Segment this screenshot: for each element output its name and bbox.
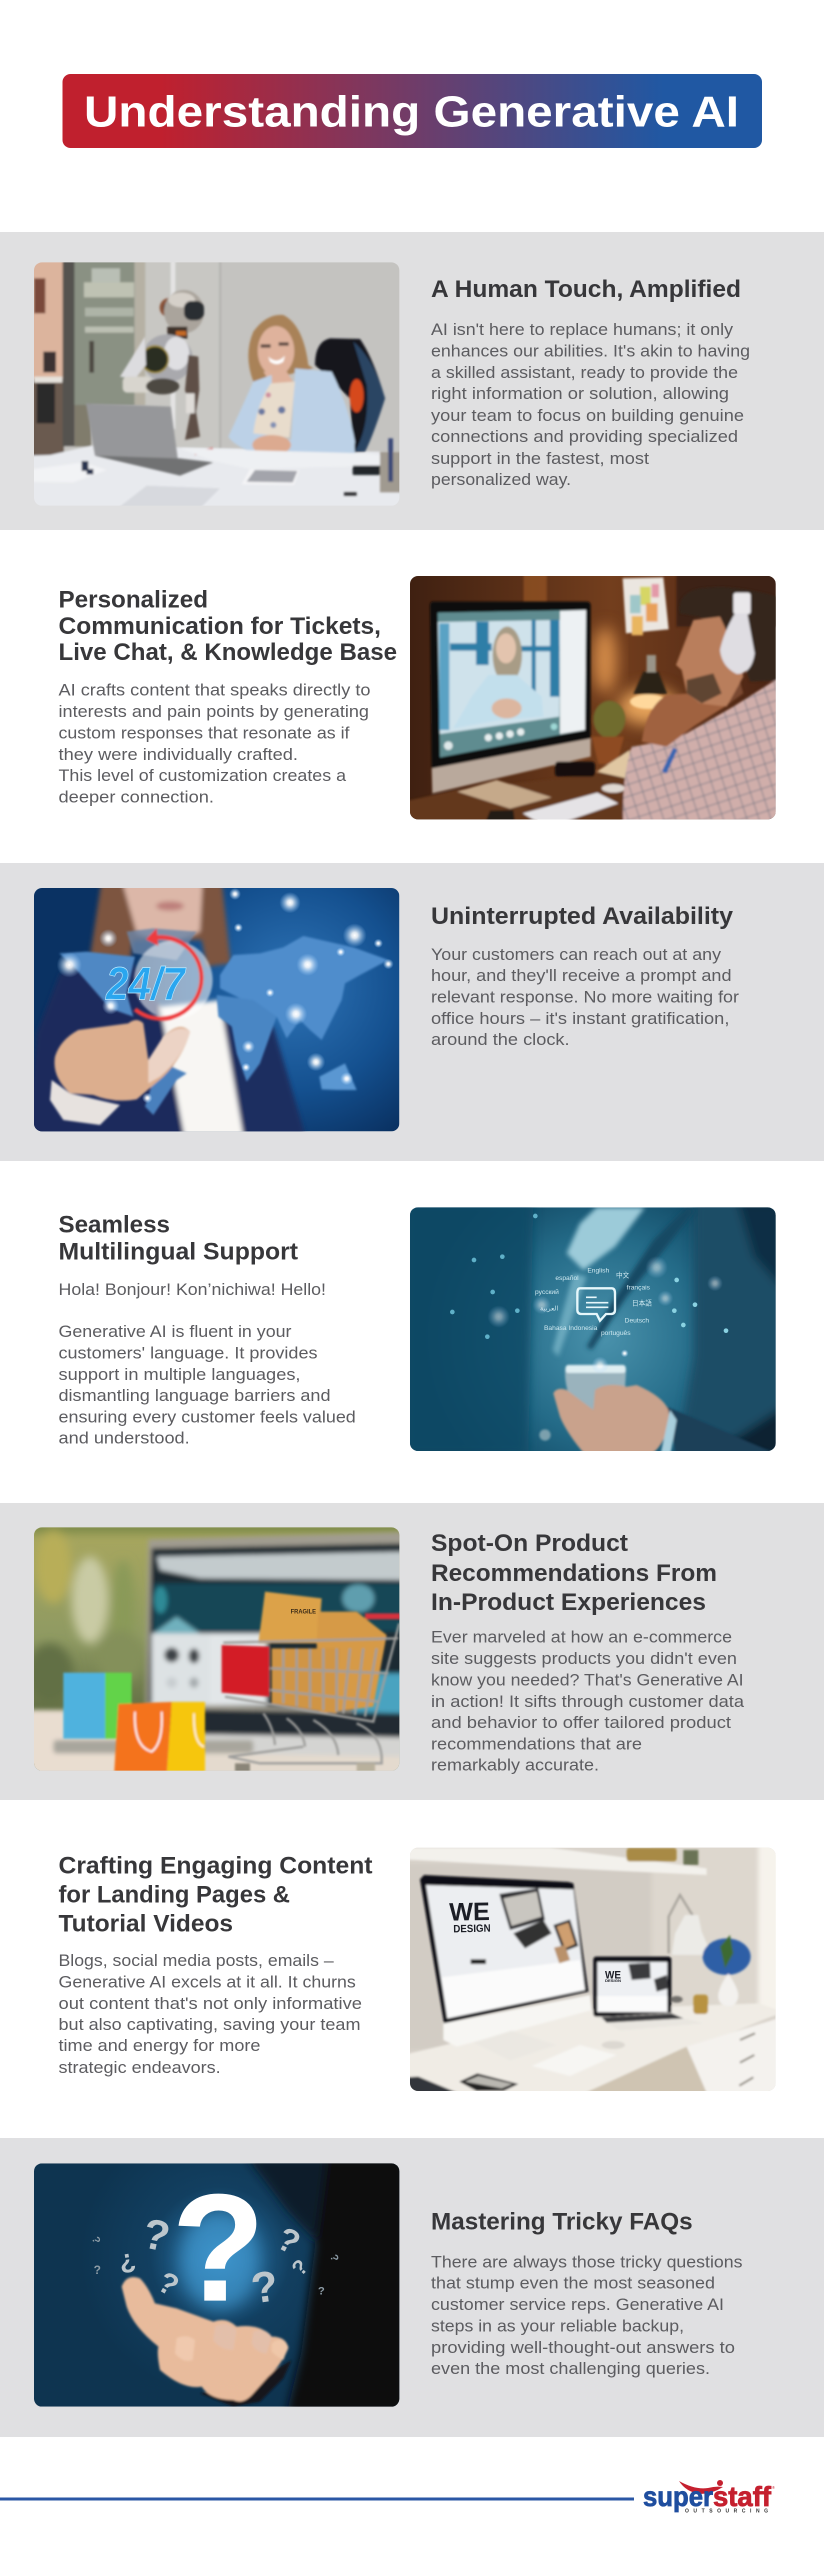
question marks: ? bbox=[139, 2209, 174, 2262]
screen lettering: DESIGN bbox=[605, 1978, 621, 1983]
body text: custom responses that resonate as if bbox=[58, 725, 350, 743]
lamp bbox=[633, 672, 667, 694]
body text: AI isn't here to replace humans; it only bbox=[431, 321, 734, 339]
network glows bbox=[57, 888, 394, 1103]
cactus bbox=[593, 701, 625, 738]
body text: relevant response. No more waiting for bbox=[431, 989, 740, 1007]
heading bbox=[58, 586, 397, 666]
body text: deeper connection. bbox=[58, 789, 214, 807]
question marks: ? bbox=[171, 2163, 265, 2334]
heading bbox=[431, 1530, 717, 1616]
keyboard bbox=[523, 793, 618, 823]
language labels: español bbox=[555, 1275, 579, 1282]
question marks: ? bbox=[94, 2263, 101, 2277]
panel: uninterrupted availability bbox=[0, 863, 824, 1161]
photo: shopping cart and laptop bbox=[23, 1520, 407, 1777]
body text: site suggests products you didn't even bbox=[431, 1650, 737, 1668]
body text: right information or solution, allowing bbox=[431, 385, 729, 403]
body text bbox=[58, 1952, 362, 2077]
language labels: français bbox=[627, 1284, 651, 1291]
language labels: 中文 bbox=[616, 1270, 630, 1279]
body text: customer service reps. Generative AI bbox=[431, 2296, 724, 2314]
flowers and vase bbox=[703, 1938, 751, 1975]
accessories bbox=[532, 2045, 617, 2076]
body text: There are always those tricky questions bbox=[431, 2253, 742, 2271]
question marks: ? bbox=[287, 2255, 313, 2281]
photo: man on video call at monitor bbox=[403, 570, 783, 827]
phone bbox=[565, 1365, 626, 1413]
question marks: ? bbox=[89, 2235, 102, 2245]
laptop bbox=[593, 1957, 671, 2017]
heading: In-Product Experiences bbox=[431, 1589, 706, 1616]
heading: Multilingual Support bbox=[58, 1239, 298, 1266]
question marks: ? bbox=[152, 2266, 184, 2303]
body text bbox=[431, 1628, 745, 1775]
man bbox=[621, 678, 776, 820]
body text bbox=[58, 1281, 356, 1448]
screen lettering: DESIGN bbox=[453, 1923, 491, 1935]
clock bbox=[134, 941, 213, 1019]
poster bbox=[623, 577, 669, 633]
hand bbox=[553, 1385, 670, 1457]
desk bbox=[403, 2003, 783, 2097]
orange and yellow bags bbox=[114, 1702, 172, 1777]
body text: Your customers can reach out at any bbox=[431, 946, 722, 964]
body text: ensuring every customer feels valued bbox=[58, 1408, 356, 1426]
heading: Tutorial Videos bbox=[58, 1910, 233, 1938]
screen lettering: WE bbox=[449, 1898, 490, 1927]
back bags bbox=[63, 1673, 107, 1739]
body text: recommendations that are bbox=[431, 1735, 642, 1753]
body text: office hours – it's instant gratification, bbox=[431, 1010, 729, 1028]
light particles bbox=[450, 1214, 728, 1374]
heading: Uninterrupted Availability bbox=[431, 903, 734, 930]
photo: robot and businesswoman at desk bbox=[27, 255, 407, 512]
language labels: English bbox=[587, 1268, 609, 1275]
body text: dismantling language barriers and bbox=[58, 1387, 330, 1405]
body text: Blogs, social media posts, emails – bbox=[58, 1952, 335, 1970]
heading: Live Chat, & Knowledge Base bbox=[58, 639, 397, 666]
body text: personalized way. bbox=[431, 471, 571, 489]
body text: Hola! Bonjour! Kon’nichiwa! Hello! bbox=[58, 1281, 326, 1299]
body text: but also captivating, saving your team bbox=[58, 2016, 360, 2034]
24/7 neon text: 24/7 bbox=[105, 957, 187, 1009]
body text: customers' language. It provides bbox=[58, 1344, 318, 1362]
laptop bbox=[86, 403, 180, 475]
question marks: ? bbox=[318, 2286, 325, 2298]
heading: Mastering Tricky FAQs bbox=[431, 2209, 693, 2236]
panel: crafting engaging content bbox=[58, 1840, 785, 2097]
body text: interests and pain points by generating bbox=[58, 703, 369, 721]
panel: personalized communication bbox=[58, 570, 783, 827]
body text: connections and providing specialized bbox=[431, 428, 738, 446]
question marks: ? bbox=[271, 2220, 306, 2263]
body text: a skilled assistant, ready to provide the bbox=[431, 364, 738, 382]
body text: that stump even the most seasoned bbox=[431, 2274, 715, 2292]
body text: Generative AI excels at it all. It churns bbox=[58, 1973, 356, 1991]
logo: superstaff outsourcing bbox=[643, 2480, 775, 2514]
question marks bbox=[89, 2163, 341, 2334]
body text bbox=[58, 682, 370, 807]
heading: A Human Touch, Amplified bbox=[431, 276, 741, 303]
body text: AI crafts content that speaks directly to bbox=[58, 682, 370, 700]
heading: Crafting Engaging Content bbox=[58, 1852, 373, 1880]
table bbox=[23, 1710, 147, 1777]
logo: superstaff outsourcing: staff bbox=[713, 2481, 772, 2512]
heading: Personalized bbox=[58, 586, 208, 614]
logo: superstaff outsourcing: ® bbox=[772, 2485, 775, 2490]
desk items bbox=[194, 448, 213, 455]
photo: hand holding glowing question marks bbox=[34, 2157, 407, 2413]
monitor bbox=[457, 780, 552, 809]
title banner bbox=[62, 74, 762, 148]
body text: they were individually crafted. bbox=[58, 746, 298, 764]
heading: Spot-On Product bbox=[431, 1530, 628, 1557]
heading: Seamless bbox=[58, 1212, 170, 1239]
woman bbox=[248, 315, 313, 382]
photo: 24/7 world map touch screen bbox=[27, 880, 399, 1140]
body text: This level of customization creates a bbox=[58, 767, 347, 785]
body text: time and energy for more bbox=[58, 2037, 260, 2055]
panel: seamless multilingual support bbox=[58, 1200, 783, 1457]
language labels bbox=[535, 1268, 652, 1337]
jacket bbox=[27, 960, 185, 1140]
screen lettering: WE bbox=[605, 1969, 621, 1981]
heading bbox=[58, 1852, 373, 1938]
heading: Recommendations From bbox=[431, 1560, 717, 1587]
logo: superstaff outsourcing: super bbox=[643, 2481, 713, 2512]
body text: Generative AI is fluent in your bbox=[58, 1323, 292, 1341]
box label: FRAGILE bbox=[291, 1608, 316, 1615]
body text: know you needed? That's Generative AI bbox=[431, 1672, 744, 1690]
hair and face bbox=[90, 880, 231, 967]
lamp bbox=[669, 1895, 693, 1953]
language labels: العربية bbox=[540, 1305, 558, 1313]
map bbox=[220, 936, 388, 1040]
boxes bbox=[365, 1613, 407, 1619]
panel: a human touch bbox=[0, 232, 824, 530]
body text: even the most challenging queries. bbox=[431, 2360, 710, 2378]
body text: out content that's not only informative bbox=[58, 1995, 362, 2013]
heading: Communication for Tickets, bbox=[58, 613, 381, 640]
hand bbox=[122, 2277, 292, 2407]
body text: your team to focus on building genuine bbox=[431, 407, 744, 425]
question marks: ? bbox=[117, 2247, 138, 2279]
body text: and understood. bbox=[58, 1430, 190, 1448]
chair bbox=[315, 338, 385, 452]
body text bbox=[431, 2253, 742, 2378]
body text: support in the fastest, most bbox=[431, 450, 649, 468]
body text: strategic endeavors. bbox=[58, 2059, 221, 2077]
body text: around the clock. bbox=[431, 1031, 570, 1049]
question marks: ? bbox=[327, 2253, 341, 2263]
screen lettering bbox=[449, 1898, 621, 1983]
robot bbox=[160, 298, 179, 317]
language labels: português bbox=[601, 1330, 631, 1337]
body text: providing well-thought-out answers to bbox=[431, 2339, 735, 2357]
language labels: Deutsch bbox=[625, 1318, 649, 1325]
footer rule bbox=[0, 2498, 634, 2500]
body text: remarkably accurate. bbox=[431, 1757, 599, 1775]
hand bbox=[54, 1020, 190, 1101]
chat icon bbox=[577, 1288, 615, 1321]
body text: and behavior to offer tailored product bbox=[431, 1714, 731, 1732]
body text bbox=[431, 946, 740, 1049]
photo: businessman holding phone with languages bbox=[403, 1200, 783, 1457]
body text: in action! It sifts through customer data bbox=[431, 1693, 745, 1711]
panel: mastering tricky FAQs bbox=[0, 2138, 824, 2437]
panel: spot-on product recommendations bbox=[0, 1503, 824, 1800]
laptop screen bbox=[145, 1532, 407, 1717]
question marks: ? bbox=[248, 2262, 281, 2313]
body text: steps in as your reliable backup, bbox=[431, 2317, 684, 2335]
language labels: русский bbox=[535, 1288, 559, 1296]
monitor bbox=[443, 1995, 592, 2047]
body text: hour, and they'll receive a prompt and bbox=[431, 967, 732, 985]
body text: enhances our abilities. It's akin to having bbox=[431, 342, 750, 360]
heading bbox=[58, 1212, 298, 1266]
language labels: Bahasa Indonesia bbox=[544, 1325, 598, 1332]
body text: Ever marveled at how an e-commerce bbox=[431, 1628, 732, 1646]
body text bbox=[431, 321, 750, 489]
body text: support in multiple languages, bbox=[58, 1366, 300, 1384]
title banner: Understanding Generative AI bbox=[84, 88, 739, 136]
photo: responsive web design on desk bbox=[403, 1840, 785, 2097]
heading: for Landing Pages & bbox=[58, 1882, 290, 1908]
language labels: 日本語 bbox=[632, 1299, 652, 1308]
cart bbox=[222, 1645, 269, 1697]
logo: superstaff outsourcing: OUTSOURCING bbox=[685, 2508, 768, 2514]
